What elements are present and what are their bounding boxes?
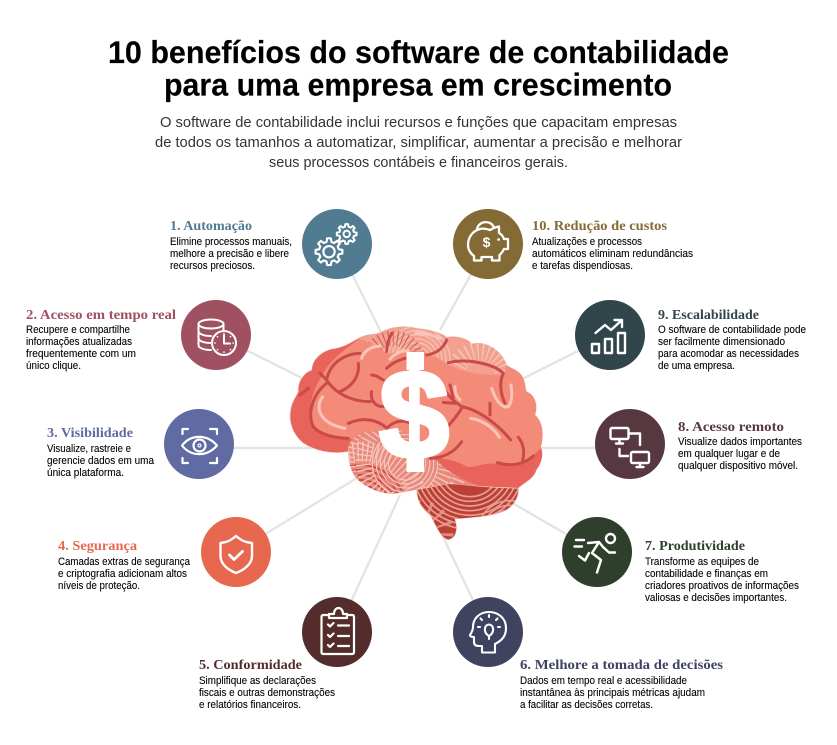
text: automação: Elimine processos manuais, [170,236,292,248]
text: redução de custos: automáticos eliminam redundâncias [532,248,694,260]
subtitle: O software de contabilidade inclui recursos e funções que capacitam empresas [160,115,677,131]
icon: connected monitors [595,409,665,479]
item 4: segurança [58,517,271,592]
item 10: redução de custos [453,209,694,279]
dollar sign: $ [379,344,449,485]
subtitle: de todos os tamanhos a automatizar, simplificar, aumentar a precisão e melhorar [155,135,682,151]
item 5: conformidade [199,597,372,711]
icon: runner [562,517,632,587]
text: visibilidade: 3. Visibilidade [47,426,133,441]
cerebrum light area [310,333,543,467]
text: automação [170,219,292,272]
icon: clipboard checklist [302,597,372,667]
text: acesso remoto: qualquer dispositivo móvel. [678,460,798,472]
text: conformidade: 5. Conformidade [199,658,302,673]
item 8: acesso remoto [595,409,803,479]
text: acesso em tempo real [26,308,176,372]
text: melhore a tomada de decisões: instantânea às principais métricas ajudam [520,687,705,699]
item 9: escalabilidade [575,300,806,372]
icon: eye [164,409,234,479]
title: 10 benefícios do software de contabilidade [108,34,729,70]
text: melhore a tomada de decisões [520,658,724,711]
item 2: acesso em tempo real [26,300,251,372]
text: segurança: níveis de proteção. [58,580,140,592]
brain illustration [290,323,543,572]
text: melhore a tomada de decisões: 6. Melhore a tomada de decisões [520,658,724,673]
top textured lobe [358,326,506,375]
text: acesso remoto: Visualize dados importantes [678,436,803,448]
item 6: melhore a tomada de decisões [453,597,724,711]
text: visibilidade: única plataforma. [47,467,124,479]
text: acesso remoto: 8. Acesso remoto [678,420,784,435]
cerebellum [416,484,519,540]
icon: piggy bank [453,209,523,279]
text: conformidade: e relatórios financeiros. [199,699,301,711]
text: redução de custos: e tarefas dispendiosas. [532,260,633,272]
text: escalabilidade: 9. Escalabilidade [658,308,759,323]
text: produtividade: Transforme as equipes de [645,556,759,568]
text: acesso remoto [678,420,803,472]
subtitle: seus processos contábeis e financeiros gerais. [269,155,568,171]
text: visibilidade: Visualize, rastreie e [47,443,131,455]
item 3: visibilidade [47,409,234,479]
text: segurança: e criptografia adicionam altos [58,568,188,580]
subtitle [155,115,682,171]
text: segurança: Camadas extras de segurança [58,556,190,568]
title: para uma empresa em crescimento [164,66,672,102]
text: redução de custos: 10. Redução de custos [532,219,668,234]
text: segurança: 4. Segurança [58,539,137,554]
brain folds [300,333,533,465]
connector lines [199,244,630,632]
cerebrum base [290,327,542,494]
text: conformidade: fiscais e outras demonstrações [199,687,336,699]
text: segurança [58,539,190,592]
text: produtividade: 7. Produtividade [645,539,745,554]
text: redução de custos: Atualizações e processos [532,236,643,248]
text: escalabilidade: O software de contabilidade pode [658,324,806,336]
text: visibilidade: gerencie dados em uma [47,455,154,467]
icon: database clock [181,300,251,370]
text: produtividade [645,539,800,604]
text: melhore a tomada de decisões: Dados em tempo real e acessibilidade [520,675,687,687]
text: automação: recursos preciosos. [170,260,255,272]
text: conformidade: Simplifique as declarações [199,675,317,687]
text: automação: melhore a precisão e libere [170,248,289,260]
text: escalabilidade [658,308,806,372]
text: automação: 1. Automação [170,219,252,234]
text: produtividade: criadores proativos de informações [645,580,800,592]
text: melhore a tomada de decisões: a facilitar as decisões corretas. [520,699,653,711]
text: escalabilidade: de uma empresa. [658,360,735,372]
text: escalabilidade: ser facilmente dimensionado [658,336,785,348]
text: conformidade [199,658,336,711]
text: visibilidade [47,426,154,479]
temporal textured lobe [348,429,483,494]
text: acesso em tempo real: único clique. [26,360,81,372]
text: acesso remoto: em qualquer lugar e de [678,448,780,460]
text: redução de custos [532,219,694,272]
icon: piggy bank: $ [483,234,491,250]
title [108,34,729,102]
text: escalabilidade: para acomodar as necessidades [658,348,800,360]
text: acesso em tempo real: informações atualizadas [26,336,133,348]
text: acesso em tempo real: frequentemente com um [26,348,136,360]
text: acesso em tempo real: Recupere e compartilhe [26,324,130,336]
brain highlights [319,333,512,437]
item 7: produtividade [562,517,800,604]
text: produtividade: valiosas e decisões importantes. [645,592,787,604]
item 1: automação [170,209,372,279]
icon: growth chart [575,300,645,370]
icon: gears [302,209,372,279]
icon: shield [201,517,271,587]
icon: head with light bulb [453,597,523,667]
text: produtividade: contabilidade e finanças em [645,568,768,580]
text: acesso em tempo real: 2. Acesso em tempo real [26,308,176,323]
